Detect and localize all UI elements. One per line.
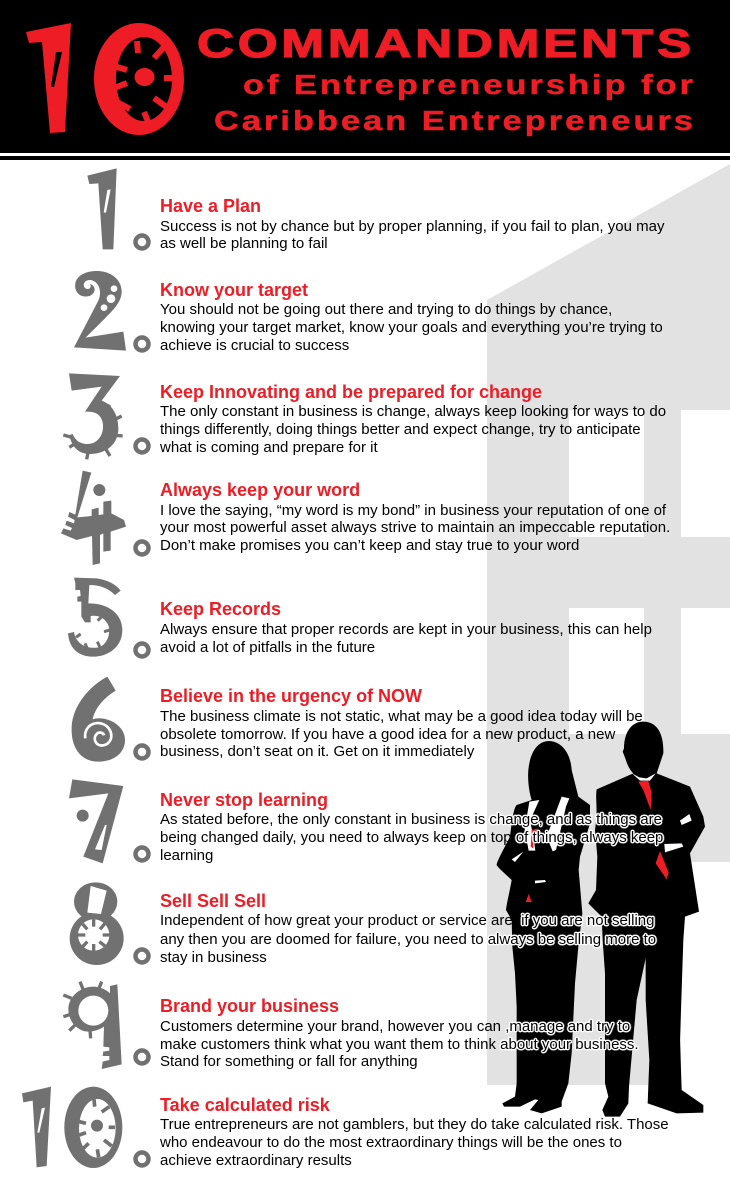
item 6: Believe in the urgency of NOW: obsolete tomorrow. If you have a good idea for a new product, a new <box>160 726 615 743</box>
title: of Entrepreneurship for <box>243 69 696 100</box>
item 5: Keep Records: avoid a lot of pitfalls in the future <box>160 639 375 656</box>
numeral 9 <box>63 982 122 1069</box>
item 10: Take calculated risk: True entrepreneurs are not gamblers, but they do take calculated risk. Those <box>160 1116 669 1133</box>
item 2: Know your target: Know your target <box>160 280 308 300</box>
numeral 7 <box>69 779 123 863</box>
bullet 8 <box>136 950 148 962</box>
item 2: Know your target: achieve is crucial to success <box>160 337 349 354</box>
item 10: Take calculated risk <box>160 1095 669 1169</box>
title: Caribbean Entrepreneurs <box>214 105 696 136</box>
item 9: Brand your business: Brand your business <box>160 996 339 1016</box>
item 3: Keep Innovating: The only constant in business is change, always keep looking for ways to do <box>160 403 666 420</box>
item 3: Keep Innovating: things differently, doing things better and expect change, try to anticipate <box>160 421 641 438</box>
item 4: Always keep your word <box>160 480 670 554</box>
item 7: Never stop learning: being changed daily, you need to always keep on top of things, always keep <box>160 829 663 846</box>
header numeral 10 <box>26 23 184 135</box>
item 1: Have a Plan: Success is not by chance but by proper planning, if you fail to plan, you may <box>160 218 664 235</box>
item 4: Always keep your word: Don’t make promises you can’t keep and stay true to your word <box>160 537 579 554</box>
numeral 5 <box>68 578 122 657</box>
item 4: Always keep your word: your most powerful asset always strive to maintain an impeccable reputation. <box>160 519 670 536</box>
bullet 7 <box>136 848 148 860</box>
item 9: Brand your business: Stand for something or fall for anything <box>160 1053 418 1070</box>
item 1: Have a Plan: as well be planning to fail <box>160 235 328 252</box>
item 3: Keep Innovating: Keep Innovating and be prepared for change <box>160 382 542 402</box>
item 8: Sell Sell Sell: any then you are doomed for failure, you need to always be selling more to <box>160 931 656 948</box>
numeral 6 <box>72 677 125 762</box>
numeral 3 <box>63 373 123 459</box>
header band <box>0 0 730 160</box>
item 7: Never stop learning: Never stop learning <box>160 790 328 810</box>
item 8: Sell Sell Sell: Sell Sell Sell <box>160 891 266 911</box>
bullet 1 <box>136 236 148 248</box>
numeral 2 <box>74 271 126 351</box>
bullet 5 <box>136 644 148 656</box>
silhouette: woman <box>497 741 590 1113</box>
item 9: Brand your business: Customers determine your brand, however you can ,manage and try to <box>160 1018 630 1035</box>
bullet 6 <box>136 746 148 758</box>
item 8: Sell Sell Sell: Independent of how great your product or service are, if you are not selling <box>160 912 654 929</box>
item 9: Brand your business: make customers think what you want them to think about your business. <box>160 1036 639 1053</box>
numeral 4 <box>61 471 126 565</box>
item 8: Sell Sell Sell: stay in business <box>160 949 267 966</box>
item 10: Take calculated risk: Take calculated risk <box>160 1095 330 1115</box>
title: COMMANDMENTS <box>197 22 695 66</box>
item 2: Know your target <box>160 280 663 354</box>
item 8: Sell Sell Sell <box>160 891 658 966</box>
item 7: Never stop learning <box>160 790 665 864</box>
item 10: Take calculated risk: achieve extraordinary results <box>160 1152 352 1169</box>
item 2: Know your target: You should not be going out there and trying to do things by chance, <box>160 301 612 318</box>
item 7: Never stop learning: As stated before, the only constant in business is change, and as things are <box>160 811 662 828</box>
item 6: Believe in the urgency of NOW: Believe in the urgency of NOW <box>160 686 422 706</box>
bullet 2 <box>136 338 148 350</box>
numeral 10 <box>22 1087 122 1168</box>
item 10: Take calculated risk: who endeavour to do the most extraordinary things will be the ones to <box>160 1134 622 1151</box>
item 6: Believe in the urgency of NOW: The business climate is not static, what may be a good idea today will be <box>160 708 643 725</box>
numeral 8 <box>70 882 124 965</box>
item 6: Believe in the urgency of NOW <box>160 686 643 760</box>
bullet 3 <box>136 440 148 452</box>
item 1: Have a Plan: Have a Plan <box>160 196 261 216</box>
item 5: Keep Records <box>160 599 652 656</box>
bullet 9 <box>136 1050 148 1064</box>
item 5: Keep Records: Keep Records <box>160 599 281 619</box>
item 7: Never stop learning: learning <box>160 847 213 864</box>
silhouette: man <box>588 722 705 1117</box>
bullet 4 <box>136 542 148 554</box>
item 5: Keep Records: Always ensure that proper records are kept in your business, this can help <box>160 621 652 638</box>
item 3: Keep Innovating: what is coming and prepare for it <box>160 439 378 456</box>
numeral 1 <box>87 168 117 249</box>
title <box>197 22 696 136</box>
item 2: Know your target: knowing your target market, know your goals and everything you’re trying to <box>160 319 663 336</box>
item 4: Always keep your word: I love the saying, “my word is my bond” in business your reputation of one of <box>160 502 666 519</box>
item 6: Believe in the urgency of NOW: business, don’t seat on it. Get on it immediately <box>160 743 474 760</box>
item 9: Brand your business <box>160 996 639 1070</box>
item 1: Have a Plan <box>160 196 664 252</box>
bullet 10 <box>136 1152 148 1166</box>
item 3: Keep Innovating <box>160 382 666 456</box>
item 4: Always keep your word: Always keep your word <box>160 480 360 500</box>
